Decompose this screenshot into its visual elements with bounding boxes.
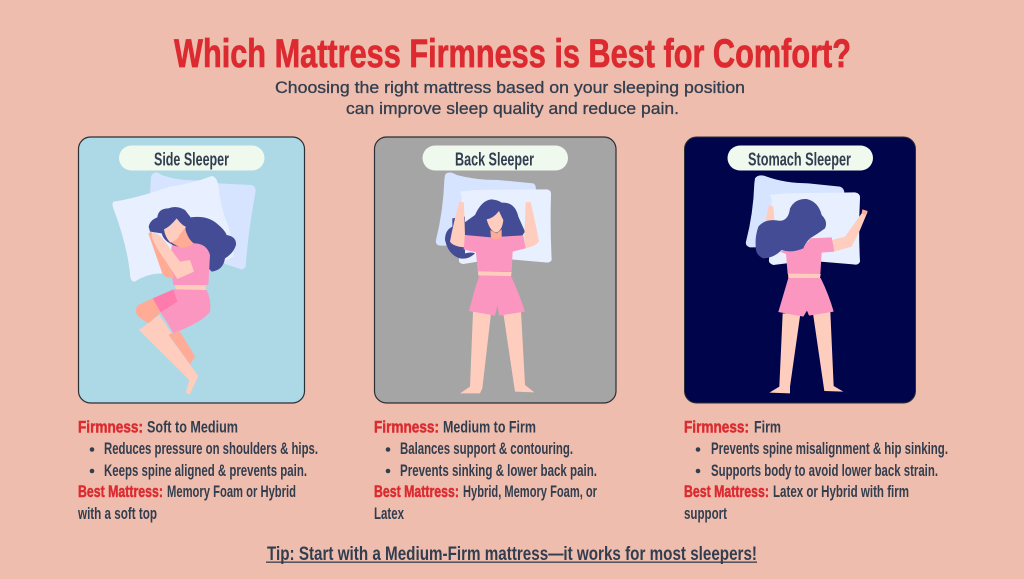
stomach sleeper details: Best Mattress: — [684, 483, 769, 501]
side sleeper details: Reduces pressure on shoulders & hips. — [104, 440, 318, 458]
side sleeper label: Side Sleeper — [154, 150, 229, 170]
title: Which Mattress Firmness is Best for Comfort? — [174, 32, 851, 76]
back sleeper details: Firmness: — [374, 418, 439, 436]
side sleeper details: Keeps spine aligned & prevents pain. — [104, 462, 307, 480]
side card background — [78, 137, 304, 403]
back sleeper details: Latex — [374, 505, 405, 523]
subtitle: can improve sleep quality and reduce pain. — [346, 100, 679, 118]
side sleeper details: Firmness: — [78, 418, 143, 436]
panel: back sleeper — [374, 137, 616, 403]
stomach sleeper details: support — [684, 505, 727, 523]
side sleeper details: Best Mattress: — [78, 483, 163, 501]
illustration: woman sleeping on side — [112, 173, 256, 394]
back sleeper details — [374, 418, 597, 523]
illustration: woman sleeping on back — [436, 172, 552, 393]
panel: stomach sleeper — [684, 137, 916, 403]
back sleeper details: Balances support & contouring. — [400, 440, 573, 458]
stomach card background — [684, 137, 916, 403]
panel: side sleeper — [78, 137, 304, 403]
stomach sleeper details: Firmness: — [684, 418, 749, 436]
stomach sleeper details — [684, 418, 948, 523]
subtitle — [275, 79, 745, 118]
back sleeper details: Hybrid, Memory Foam, or — [463, 483, 597, 501]
side sleeper details — [77, 418, 318, 523]
side sleeper details: Soft to Medium — [147, 418, 238, 436]
stomach sleeper details: Firm — [754, 418, 781, 436]
back sleeper details: Prevents sinking & lower back pain. — [400, 462, 597, 480]
back sleeper details: Best Mattress: — [374, 483, 459, 501]
back sleeper label: Back Sleeper — [455, 150, 534, 170]
back sleeper details: Medium to Firm — [443, 418, 536, 436]
stomach sleeper details: Latex or Hybrid with firm — [773, 483, 909, 501]
back sleeper label — [422, 146, 568, 170]
side sleeper label — [119, 146, 264, 170]
subtitle: Choosing the right mattress based on your sleeping position — [275, 79, 745, 97]
illustration: woman sleeping on stomach — [746, 175, 868, 393]
side sleeper details: with a soft top — [77, 505, 157, 523]
tip: Tip: Start with a Medium-Firm mattress—it works for most sleepers! — [267, 544, 757, 565]
side sleeper details: Memory Foam or Hybrid — [167, 483, 296, 501]
stomach sleeper label — [728, 146, 873, 170]
back card background — [374, 137, 616, 403]
stomach sleeper label: Stomach Sleeper — [748, 150, 851, 170]
